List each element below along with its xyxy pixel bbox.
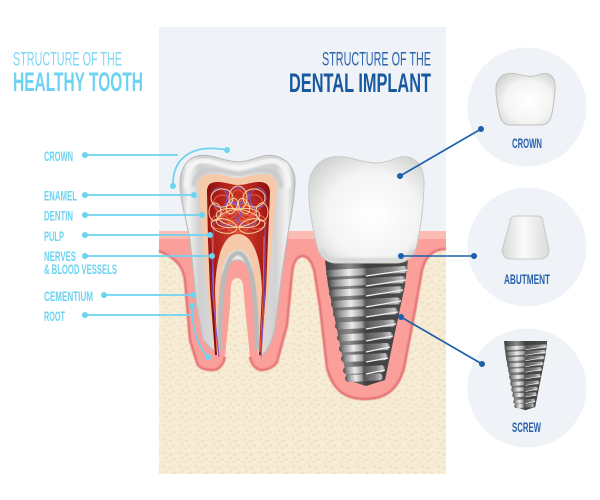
tooth labels: CROWN <box>44 148 73 164</box>
title: dental implant <box>289 48 431 98</box>
dentin shadow <box>194 170 281 188</box>
panel: central illustration background <box>159 27 446 474</box>
icon: crown <box>496 73 555 125</box>
tooth callout dots <box>82 147 230 360</box>
label: crown: CROWN <box>512 135 542 151</box>
title: dental implant: DENTAL IMPLANT <box>289 68 431 98</box>
gum tissue <box>159 231 446 399</box>
tooth labels: PULP <box>44 228 64 244</box>
implant crown lower lip shading <box>321 249 414 260</box>
pulp <box>207 182 270 355</box>
inner grey arch <box>220 253 257 350</box>
title: healthy tooth: HEALTHY TOOTH <box>13 67 143 97</box>
tooth callout lines <box>85 148 227 357</box>
tooth enamel and cementum <box>180 155 295 355</box>
jaw bone <box>159 246 446 474</box>
panel: screw circle <box>468 328 586 448</box>
tooth labels: CEMENTIUM <box>44 288 93 304</box>
crown highlight <box>186 161 289 186</box>
dentin <box>198 174 277 354</box>
icon: abutment <box>502 216 549 259</box>
tooth labels: DENTIN <box>44 208 73 224</box>
nerves and blood vessels <box>209 186 268 357</box>
label: abutment: ABUTMENT <box>504 271 550 287</box>
implant screw <box>325 260 408 386</box>
implant crown <box>309 157 424 263</box>
title: healthy tooth <box>13 48 143 97</box>
icon: screw <box>504 341 547 410</box>
panel: abutment circle <box>468 188 586 306</box>
tooth labels: ROOT <box>44 308 65 324</box>
tooth labels: ENAMEL <box>44 188 77 204</box>
dental implant <box>309 157 424 386</box>
label: screw: SCREW <box>512 419 541 435</box>
tooth labels <box>44 148 117 324</box>
implant callout dots <box>397 126 485 367</box>
healthy tooth <box>180 155 295 357</box>
title: dental implant: STRUCTURE OF THE <box>322 48 431 70</box>
tooth labels: NERVES <box>44 248 76 264</box>
implant callout lines <box>400 129 482 364</box>
tooth labels: & BLOOD VESSELS <box>44 261 117 277</box>
title: healthy tooth: STRUCTURE OF THE <box>13 48 122 70</box>
panel: crown circle <box>468 48 586 166</box>
